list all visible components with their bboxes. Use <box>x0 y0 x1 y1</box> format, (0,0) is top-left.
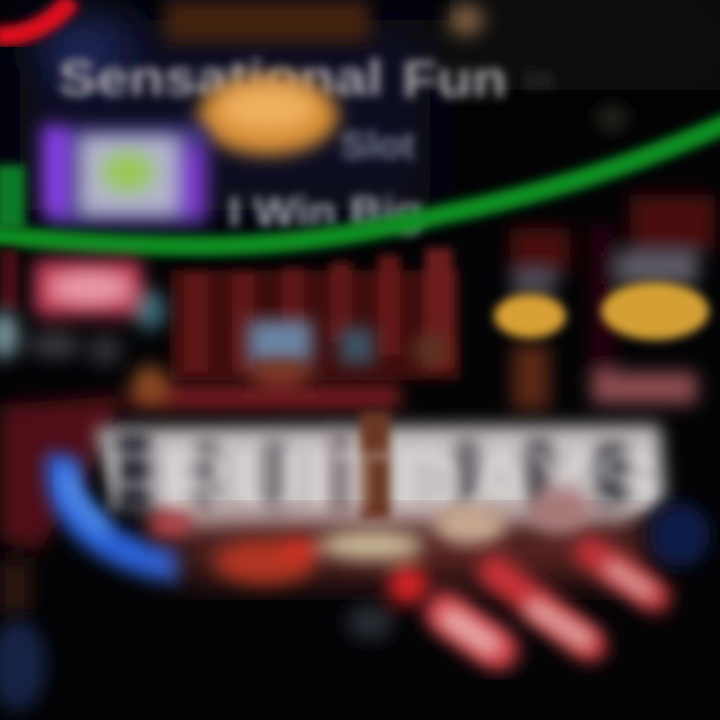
blue bottom left <box>0 619 46 711</box>
table dark letters <box>116 428 626 514</box>
red arc top left <box>0 0 72 36</box>
red floor band <box>0 362 400 615</box>
game table <box>63 412 710 650</box>
background upper haze <box>20 0 720 210</box>
red and white fingers <box>445 552 655 650</box>
table lower chips band <box>180 525 650 575</box>
white finger highlights <box>450 568 648 645</box>
headline text: I Win Big <box>228 188 423 235</box>
top brown backdrop <box>165 0 626 130</box>
green arc <box>0 122 720 246</box>
orange badge <box>198 75 338 155</box>
dark blue right edge <box>650 503 710 567</box>
table chips <box>146 486 590 640</box>
red curtains right <box>510 195 715 410</box>
headline text: Slot <box>340 125 415 167</box>
headline text <box>58 50 553 235</box>
green left block <box>0 165 25 230</box>
pink sign <box>0 260 166 366</box>
blue screens <box>248 320 448 366</box>
gold oval signs <box>494 282 709 340</box>
headline text: in <box>525 61 553 97</box>
table blue highlight <box>66 470 108 530</box>
table white band <box>95 425 665 532</box>
table label text: FRUITDAYS <box>100 432 660 531</box>
table blue rim <box>63 455 180 566</box>
headline text: Fun <box>402 51 507 109</box>
center brown post <box>360 412 390 520</box>
red curtains center <box>0 248 460 380</box>
headline text: Sensational <box>58 50 383 106</box>
purple panel <box>42 125 208 226</box>
